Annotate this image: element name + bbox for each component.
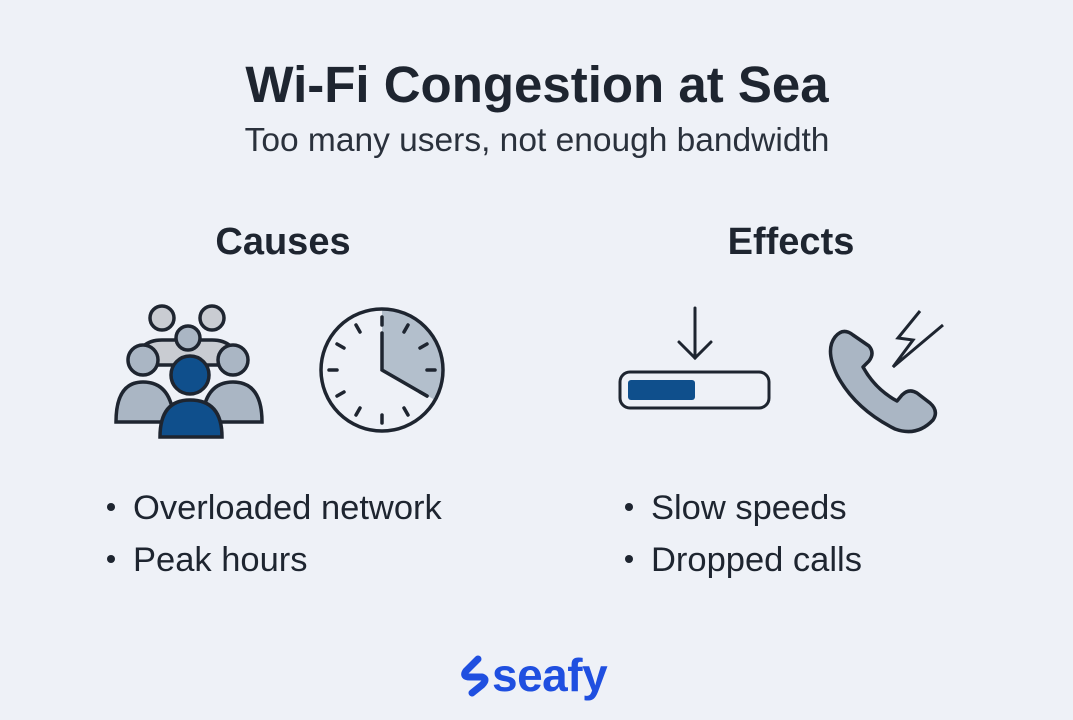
list: causes (107, 489, 442, 579)
icon: people crowd (114, 304, 264, 439)
list: effects (625, 489, 862, 579)
icon: slow download bar (618, 306, 770, 410)
icon: dropped call phone (828, 310, 944, 434)
icon: clock (319, 307, 445, 433)
subtitle: Too many users, not enough bandwidth (245, 122, 829, 159)
title: Wi-Fi Congestion at Sea (245, 56, 829, 113)
heading: causes: Causes (215, 221, 351, 263)
list: causes: Peak hours (133, 541, 308, 579)
logo: seafy: seafy (492, 649, 607, 701)
list: effects: Dropped calls (651, 541, 862, 579)
list: effects: Slow speeds (651, 489, 847, 527)
list: causes: Overloaded network (133, 489, 442, 527)
heading: effects: Effects (728, 221, 854, 263)
